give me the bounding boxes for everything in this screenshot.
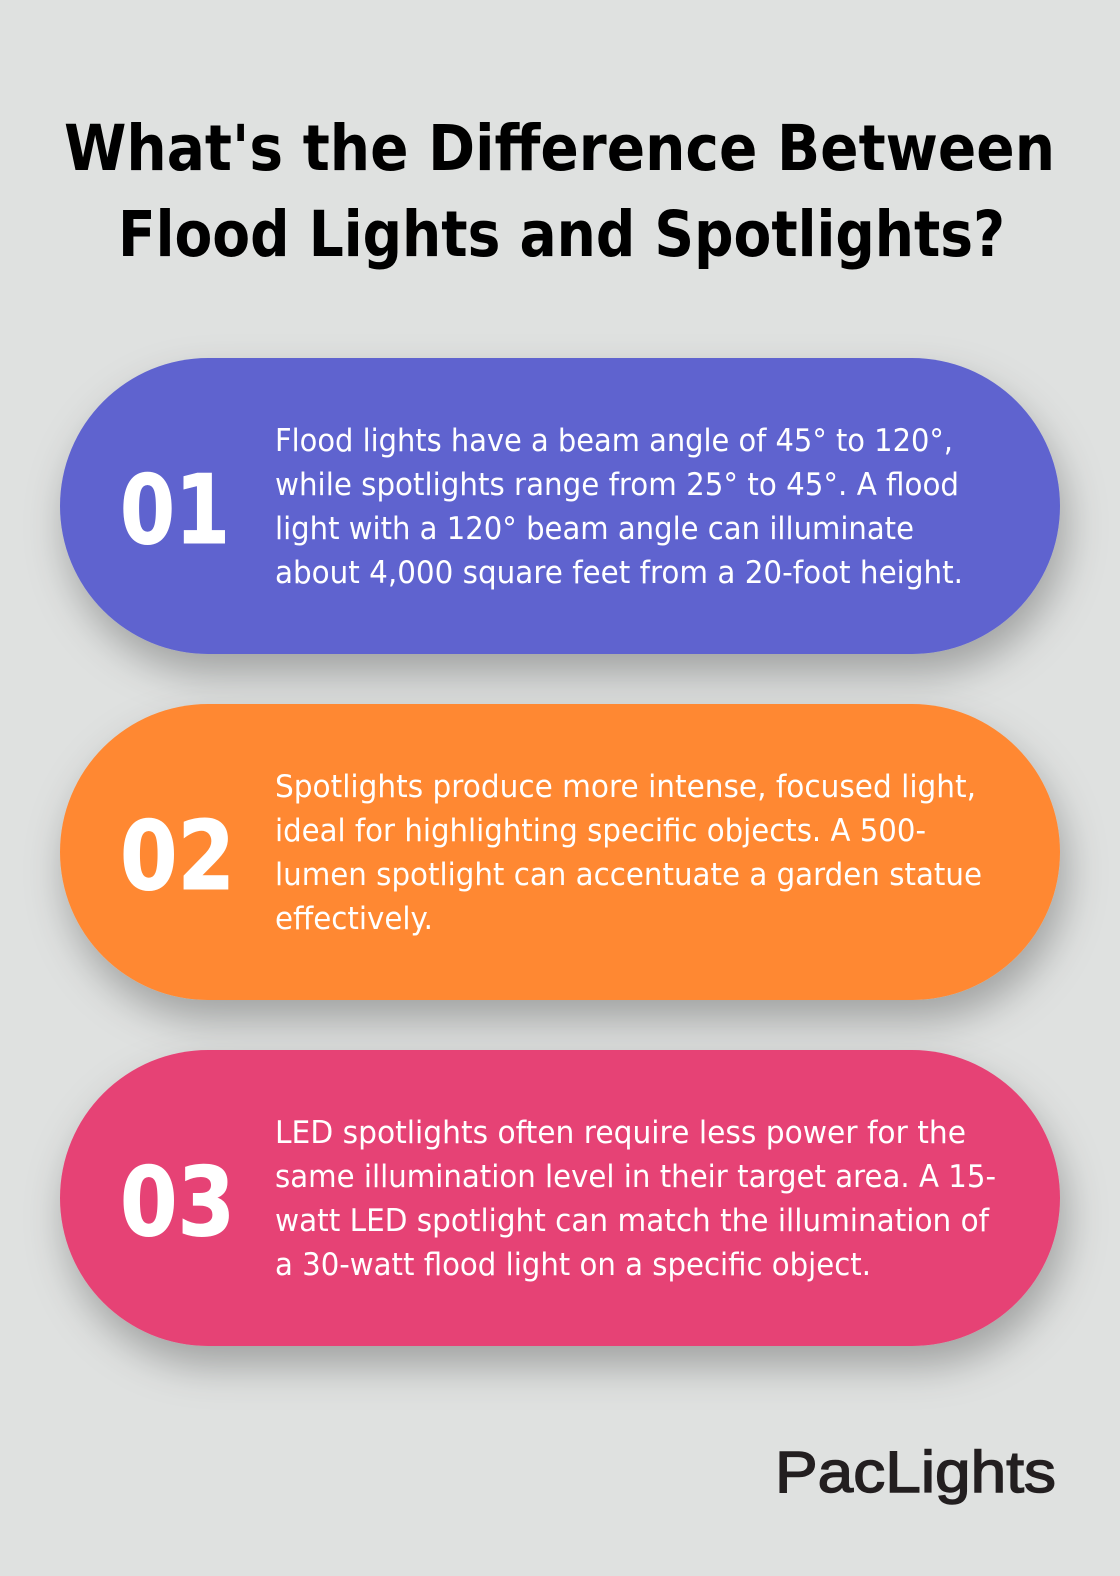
panel: step 03 (60, 1050, 1060, 1346)
logo: PacLights: PacLights (775, 1440, 1056, 1505)
pill background: purple (60, 358, 1060, 654)
text block: beam angles (275, 423, 963, 591)
text block: power use: same illumination level in their target area. A 15- (275, 1159, 996, 1195)
text block: beam angles: while spotlights range from 25° to 45°. A flood (275, 467, 959, 503)
pill background: pink (60, 1050, 1060, 1346)
step number 02: 02 (120, 802, 235, 912)
text block: beam angles: about 4,000 square feet from a 20-foot height. (275, 555, 963, 591)
step number 03: 03 (120, 1148, 235, 1258)
text block: power use: watt LED spotlight can match the illumination of (275, 1203, 990, 1239)
panel: step 01 (60, 358, 1060, 654)
text block: beam angles: light with a 120° beam angle can illuminate (275, 511, 914, 547)
title (64, 112, 1055, 271)
title: Flood Lights and Spotlights? (118, 198, 1005, 271)
text block: focused light: effectively. (275, 901, 433, 937)
text block: focused light: ideal for highlighting specific objects. A 500- (275, 813, 926, 849)
text block: focused light (275, 769, 982, 937)
text block: power use (275, 1115, 996, 1283)
step number 01: 01 (120, 456, 230, 566)
panel: step 02 (60, 704, 1060, 1000)
text block: power use: LED spotlights often require less power for the (275, 1115, 966, 1151)
text block: power use: a 30-watt flood light on a specific object. (275, 1247, 871, 1283)
pill background: orange (60, 704, 1060, 1000)
text block: beam angles: Flood lights have a beam angle of 45° to 120°, (275, 423, 953, 459)
text block: focused light: Spotlights produce more intense, focused light, (275, 769, 976, 805)
text block: focused light: lumen spotlight can accentuate a garden statue (275, 857, 982, 893)
